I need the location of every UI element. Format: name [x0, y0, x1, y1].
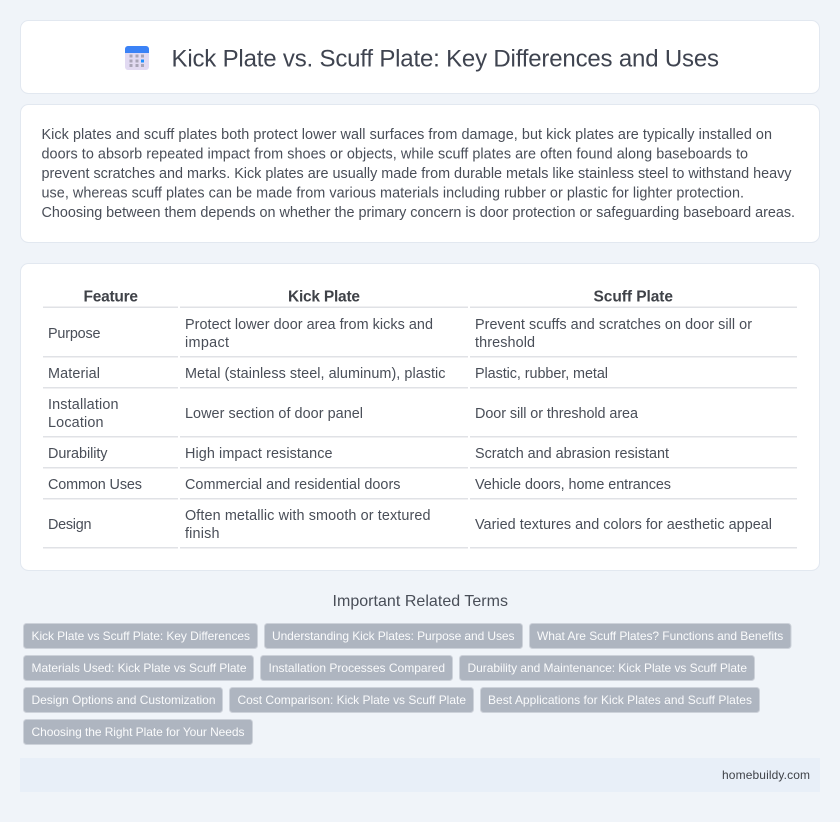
tag: installation processes: Installation Processes Compared — [268, 661, 445, 675]
tag: understanding kick plates — [264, 624, 522, 648]
text block: introduction paragraph: use, whereas scuff plates can be made from various materials including rubber or plastic for lighter protection. — [42, 186, 744, 202]
table row: Installation Location: Door sill or threshold area — [475, 406, 638, 422]
tag: durability and maintenance: Durability and Maintenance: Kick Plate vs Scuff Plate — [468, 661, 747, 675]
table row: Purpose — [48, 317, 752, 351]
table row: Material: Metal (stainless steel, aluminum), plastic — [185, 366, 446, 382]
table row: Installation Location: Lower section of door panel — [185, 406, 363, 422]
table row: Installation Location — [48, 397, 638, 431]
table row: Design — [48, 508, 772, 542]
text block: introduction paragraph: Kick plates and scuff plates both protect lower wall surfaces from damage, but kick plates are typically installed on — [42, 127, 772, 143]
tag: understanding kick plates: Understanding Kick Plates: Purpose and Uses — [272, 629, 514, 643]
tag: cost comparison — [230, 688, 474, 712]
heading: important related terms: Important Related Terms — [332, 593, 508, 610]
table header row — [84, 288, 673, 306]
table row: Purpose: impact — [185, 335, 229, 351]
table row: Material — [48, 366, 608, 382]
table header row: Feature — [84, 288, 138, 306]
tag: key differences: Kick Plate vs Scuff Plate: Key Differences — [32, 629, 250, 643]
tag: key differences — [24, 624, 258, 648]
panel: related term tags — [24, 624, 791, 744]
table row: Design: Design — [48, 517, 92, 533]
table row: Durability: Scratch and abrasion resistant — [475, 446, 669, 462]
text block: introduction paragraph: Choosing between them depends on whether the primary concern is door protection or safeguarding baseboard areas. — [42, 205, 795, 221]
tag: durability and maintenance — [460, 656, 754, 680]
table row: Material: Plastic, rubber, metal — [475, 366, 608, 382]
footer site name: homebuildy.com — [722, 768, 810, 782]
table row: Durability: High impact resistance — [185, 446, 332, 462]
table row: Installation Location: Location — [48, 415, 104, 431]
table row: Common Uses: Commercial and residential doors — [185, 477, 400, 493]
footer — [20, 758, 820, 792]
table row: Design: finish — [185, 526, 220, 542]
panel: comparison table — [20, 264, 820, 570]
tag: what are scuff plates: What Are Scuff Plates? Functions and Benefits — [537, 629, 783, 643]
tag: choosing the right plate — [24, 720, 252, 744]
tag: installation processes — [260, 656, 452, 680]
table row: Design: Often metallic with smooth or textured — [185, 508, 430, 524]
table header row: Scuff Plate — [594, 288, 673, 306]
tag: materials used: Materials Used: Kick Plate vs Scuff Plate — [32, 661, 247, 675]
tag: choosing the right plate: Choosing the Right Plate for Your Needs — [32, 725, 244, 739]
text block: introduction paragraph: prevent scratches and marks. Kick plates are usually made from durable metals like stainless steel to withstand heavy — [42, 166, 792, 182]
panel: introduction — [20, 104, 820, 242]
tag: cost comparison: Cost Comparison: Kick Plate vs Scuff Plate — [238, 693, 466, 707]
icon: calendar grid — [125, 46, 149, 70]
tag: best applications: Best Applications for Kick Plates and Scuff Plates — [488, 693, 752, 707]
tag: design options: Design Options and Customization — [32, 693, 216, 707]
table row: Design: Varied textures and colors for aesthetic appeal — [475, 517, 772, 533]
table row: Common Uses: Common Uses — [48, 477, 142, 493]
table row: Purpose: Purpose — [48, 326, 100, 342]
title: Kick Plate vs. Scuff Plate: Key Differences and Uses — [172, 46, 719, 72]
table header row: Kick Plate — [288, 288, 360, 306]
table row: Common Uses — [48, 477, 671, 493]
panel: title header — [20, 20, 820, 94]
table row: Purpose: Prevent scuffs and scratches on door sill or — [475, 317, 752, 333]
table row: Common Uses: Vehicle doors, home entrances — [475, 477, 671, 493]
text block: introduction paragraph — [42, 127, 795, 221]
tag: best applications — [480, 688, 760, 712]
table row: Purpose: Protect lower door area from kicks and — [185, 317, 433, 333]
tag: what are scuff plates — [530, 624, 791, 648]
tag: materials used — [24, 656, 254, 680]
text block: introduction paragraph: doors to absorb repeated impact from shoes or objects, while scuff plates are often found along baseboards to — [42, 146, 748, 162]
table row: Material: Material — [48, 366, 100, 382]
table row: Installation Location: Installation — [48, 397, 118, 413]
table row: Durability — [48, 446, 669, 462]
table row: Durability: Durability — [48, 446, 108, 462]
tag: design options — [24, 688, 222, 712]
table row: Purpose: threshold — [475, 335, 535, 351]
